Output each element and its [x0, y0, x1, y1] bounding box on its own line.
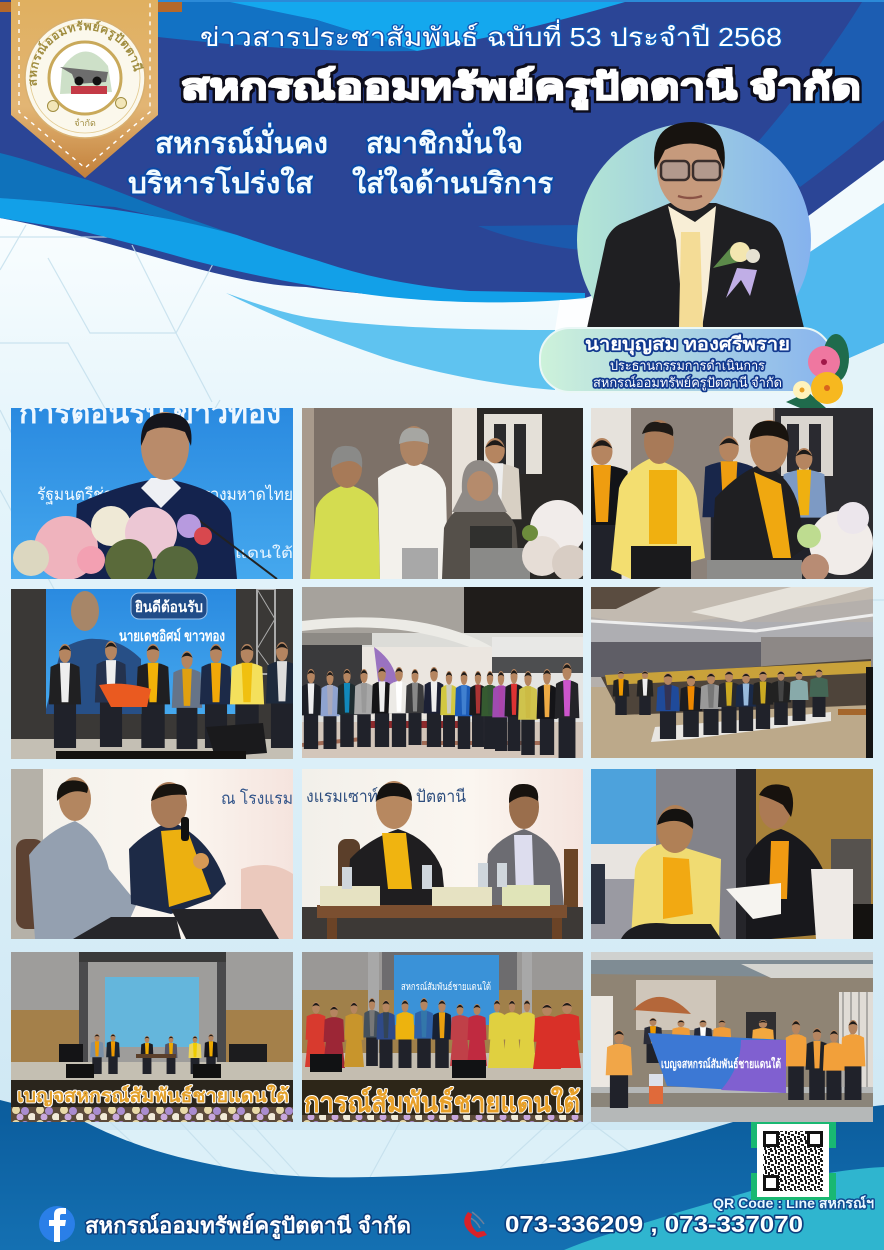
co-op seal logo: สหกรณ์ออมทรัพย์ครูปัตตานี — [29, 20, 144, 86]
co-op seal logo — [24, 18, 146, 139]
white sweep below portrait — [555, 300, 595, 330]
portrait: chairman — [587, 122, 804, 328]
bottom band — [0, 1100, 884, 1250]
photo 12: outdoor group with banner: เบญจสหกรณ์สัมพันธ์ชายแดนใต้ — [661, 1056, 781, 1071]
name plate: สหกรณ์ออมทรัพย์ครูปัตตานี จำกัด — [593, 375, 782, 391]
wave: right sky blue — [760, 203, 884, 360]
facebook page name: สหกรณ์ออมทรัพย์ครูปัตตานี จำกัด — [85, 1213, 411, 1240]
wave: medium blue — [0, 153, 237, 235]
background: top edge line — [158, 0, 884, 2]
wave: right blue band — [757, 2, 884, 187]
portrait circle — [577, 123, 811, 357]
photo 2: officials at lectern — [302, 408, 583, 579]
phone numbers: 073-336209 , 073-337070 — [505, 1211, 803, 1237]
icon: phone — [464, 1212, 487, 1238]
photo 11: stage with dancers — [302, 952, 583, 1122]
tropical flowers — [786, 334, 849, 408]
photo 6: seminar audience — [591, 587, 873, 758]
photo 1: speaker at podium: ชายแดนใต้ — [201, 544, 293, 562]
photo 3: yellow jacket members — [591, 408, 873, 579]
wave: bright blue — [0, 198, 585, 302]
photo 10: stage wide view with banner — [11, 952, 293, 1122]
QR caption: QR Code : Line สหกรณ์ฯ — [713, 1195, 874, 1211]
photo 10: stage wide view with banner: เบญจสหกรณ์สัมพันธ์ชายแดนใต้ — [17, 1084, 289, 1107]
issue line heading: ข่าวสารประชาสัมพันธ์ ฉบับที่ 53 ประจำปี 2568 — [200, 19, 782, 52]
name plate: ประธานกรรมการดำเนินการ — [610, 358, 765, 373]
slogans: บริหารโปร่งใส — [128, 165, 313, 200]
name plate — [540, 328, 849, 408]
corsage — [713, 242, 760, 298]
wave: top medium blue band — [158, 2, 417, 51]
icon: facebook — [39, 1206, 75, 1242]
co-op seal logo: จำกัด — [74, 118, 96, 128]
wave: right lower pale — [835, 343, 884, 410]
slogans — [128, 122, 553, 200]
name plate: นายบุญสม ทองศรีพราย — [585, 334, 790, 356]
photo 4: welcome bouquet on stage: ยินดีต้อนรับ — [135, 598, 203, 616]
photo 7: panel speakers talking — [11, 769, 293, 939]
hexagon line pattern — [0, 225, 884, 1177]
slogans: สหกรณ์มั่นคง — [155, 122, 328, 160]
main title: สหกรณ์ออมทรัพย์ครูปัตตานี จำกัด — [181, 66, 861, 110]
photo 1: speaker at podium — [11, 397, 293, 579]
wave: right white sweep — [740, 160, 884, 285]
photo 11: stage with dancers: สหกรณ์สัมพันธ์ชายแดนใต้ — [401, 981, 491, 993]
background: light centre — [0, 200, 884, 1130]
wave: sky blue swoosh — [226, 293, 555, 390]
photo 4: welcome bouquet on stage — [11, 589, 293, 759]
photo 8: panel at table — [302, 769, 583, 939]
gold ribbon badge — [11, 0, 158, 178]
photo 5: group photo in atrium — [302, 587, 583, 758]
photo 12: outdoor group with banner — [591, 952, 873, 1122]
photo 9: moderator and guest — [591, 769, 873, 939]
ribbon bar — [0, 2, 182, 12]
bottom teal wave — [564, 1167, 884, 1250]
slogans: ใส่ใจด้านบริการ — [352, 166, 553, 200]
photo 4: welcome bouquet on stage: นายเดชอิศม์ ขาวทอง — [119, 627, 225, 645]
QR code — [751, 1122, 836, 1200]
wave: navy dark accent — [478, 225, 580, 250]
slogans: สมาชิกมั่นใจ — [366, 122, 523, 160]
photo 8: panel at table: งแรมเซาท์เบิร์ก ปัตตานี — [306, 787, 466, 806]
background: navy header — [0, 0, 884, 310]
photo 1: speaker at podium: การต้อนรับ ข้าวทอง — [19, 397, 281, 430]
wave: top bright band — [230, 2, 625, 51]
